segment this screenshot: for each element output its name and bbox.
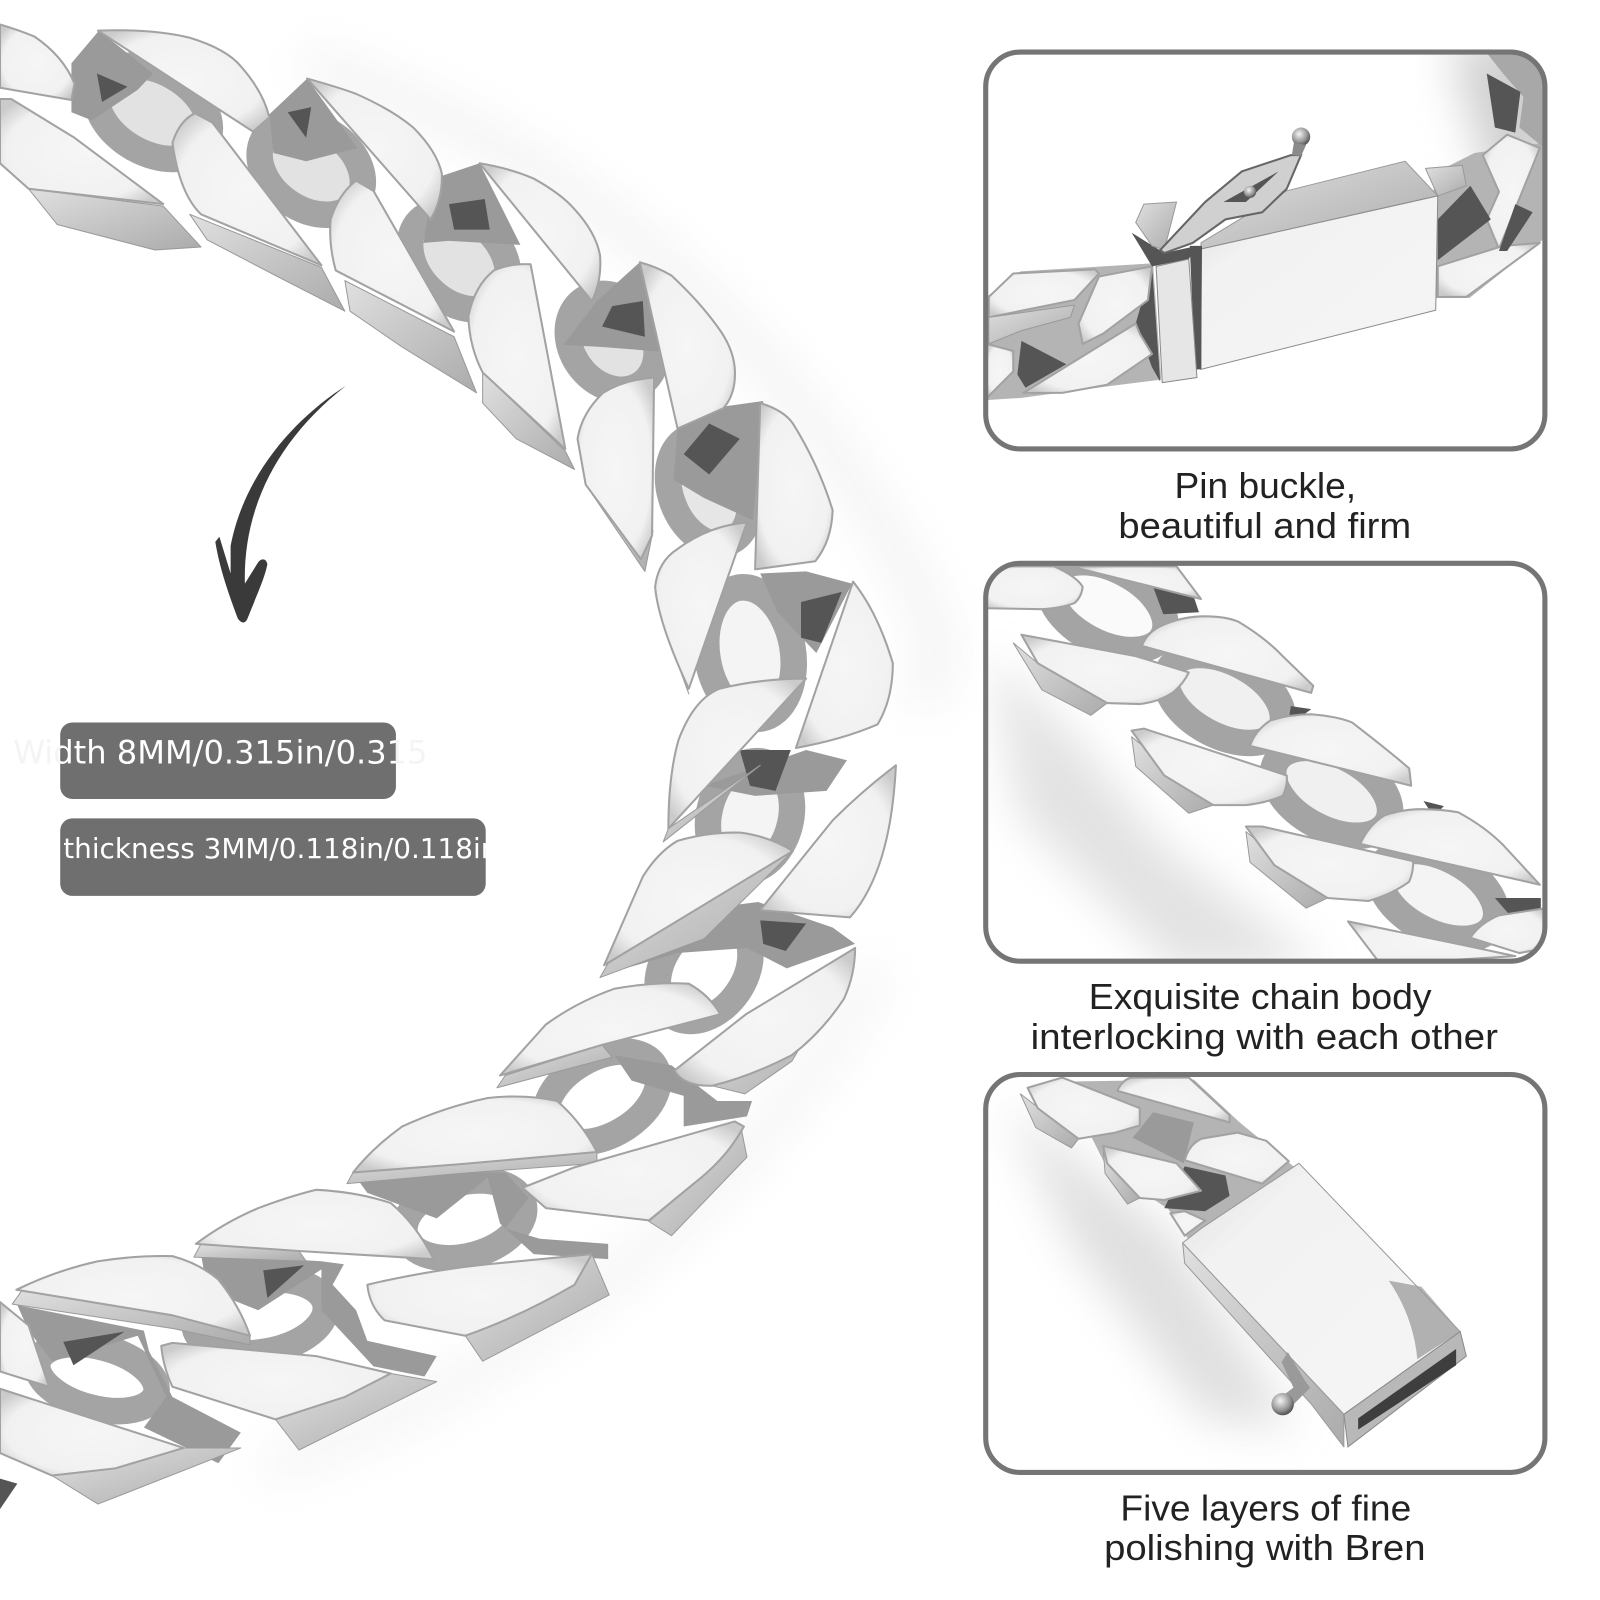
panel border xyxy=(986,563,1545,961)
main chain bracelet xyxy=(0,24,939,1509)
link rings behind plates xyxy=(30,46,804,1423)
panel: chain body xyxy=(980,544,1546,969)
panel: polishing xyxy=(986,1074,1545,1472)
inner link textures upper arc xyxy=(71,31,852,796)
panel photo: clasp end xyxy=(1016,1077,1467,1448)
panel: pin buckle xyxy=(986,41,1561,449)
inner link textures lower arc xyxy=(0,902,855,1509)
spec pill: thickness xyxy=(60,818,498,896)
caption: polishing: polishing with Bren xyxy=(1104,1528,1426,1568)
panel border xyxy=(986,1074,1545,1472)
spec pill: width: Width 8MM/0.315in/0.315 xyxy=(13,733,428,771)
panel photo: clasp xyxy=(988,54,1542,400)
caption: polishing: Five layers of fine xyxy=(1120,1488,1411,1528)
chain soft shadow xyxy=(265,61,939,1469)
link side faces xyxy=(12,189,855,1504)
spec pill: thickness: thickness 3MM/0.118in/0.118in xyxy=(63,832,498,865)
link top plates xyxy=(0,24,896,1476)
arrow pointing down xyxy=(215,386,346,622)
panel border xyxy=(986,52,1545,449)
caption: chain body: Exquisite chain body xyxy=(1089,977,1432,1017)
caption: pin buckle: beautiful and firm xyxy=(1118,506,1411,546)
spec pill: width xyxy=(13,722,428,799)
caption: pin buckle: Pin buckle, xyxy=(1174,466,1356,506)
panel photo: interlocking links xyxy=(980,544,1546,969)
caption: chain body: interlocking with each other xyxy=(1031,1017,1498,1057)
